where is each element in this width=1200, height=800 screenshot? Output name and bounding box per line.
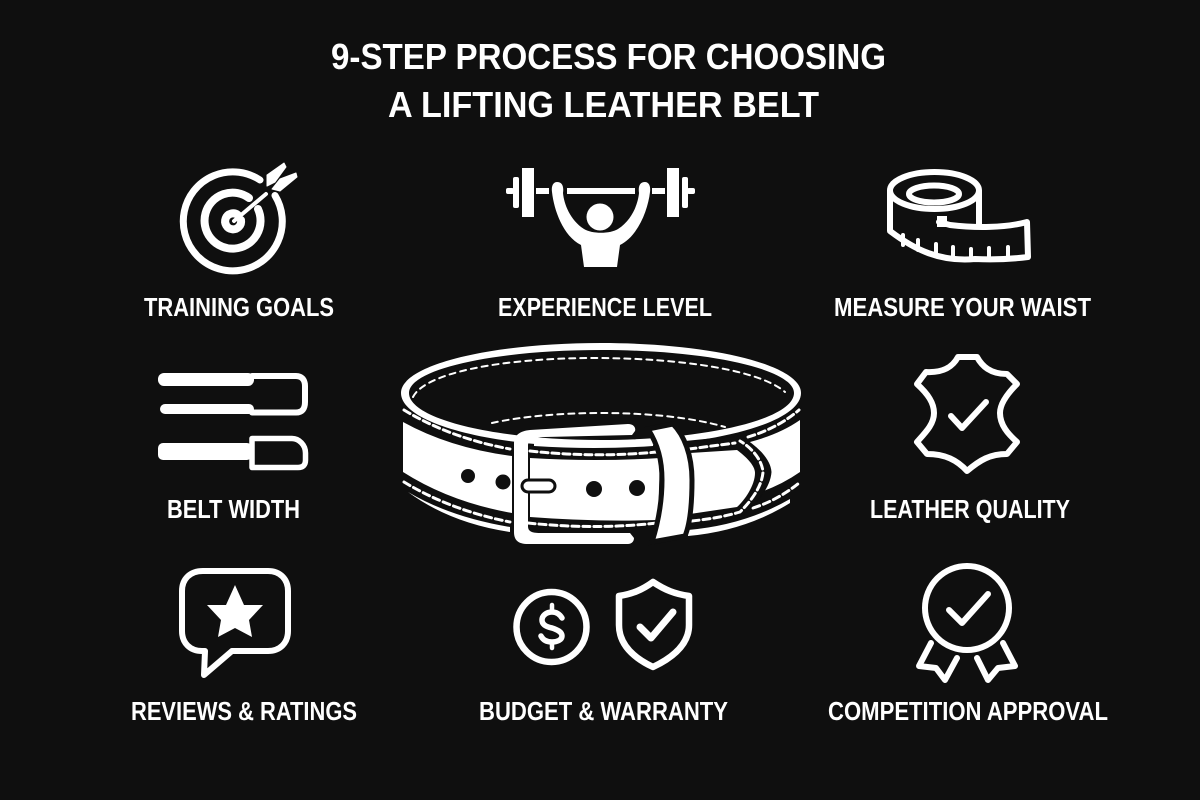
panel: training goals: [144, 163, 334, 322]
title: [331, 36, 886, 125]
label: EXPERIENCE LEVEL: [498, 292, 712, 322]
icon: shield with check: [619, 582, 689, 667]
icon: belt width straps: [158, 373, 306, 468]
belt loop: [648, 424, 692, 542]
panel: budget and warranty: [479, 582, 728, 726]
strap through buckle: [534, 441, 653, 448]
label: BELT WIDTH: [167, 494, 300, 524]
label: BUDGET & WARRANTY: [479, 696, 728, 726]
icon: target with arrow: [183, 163, 297, 271]
panel: belt width: [158, 373, 306, 524]
inner stitching: [413, 358, 785, 397]
buckle prong: [522, 480, 555, 492]
buckle frame: [514, 424, 635, 544]
panel: reviews and ratings: [131, 571, 357, 726]
title: A LIFTING LEATHER BELT: [388, 84, 819, 125]
title: 9-STEP PROCESS FOR CHOOSING: [331, 36, 886, 77]
panel: competition approval: [828, 566, 1108, 726]
icon: tape measure: [890, 172, 1028, 259]
label: LEATHER QUALITY: [870, 494, 1070, 524]
icon: leather hide with check: [917, 357, 1017, 471]
label: REVIEWS & RATINGS: [131, 696, 357, 726]
label: MEASURE YOUR WAIST: [834, 292, 1091, 322]
panel: experience level: [498, 168, 712, 322]
belt tip: [680, 436, 771, 530]
right band: [750, 420, 800, 494]
left band: [403, 422, 512, 513]
label: TRAINING GOALS: [144, 292, 334, 322]
icon: award ribbon with check: [919, 566, 1015, 680]
label: COMPETITION APPROVAL: [828, 696, 1108, 726]
icon: dollar coin: [516, 592, 586, 662]
illustration: leather belt: [401, 343, 801, 544]
icon: speech bubble with star: [182, 571, 288, 675]
panel: leather quality: [870, 357, 1070, 524]
icon: weightlifter: [506, 168, 695, 267]
belt rim: [401, 343, 801, 447]
panel: measure your waist: [834, 172, 1091, 322]
